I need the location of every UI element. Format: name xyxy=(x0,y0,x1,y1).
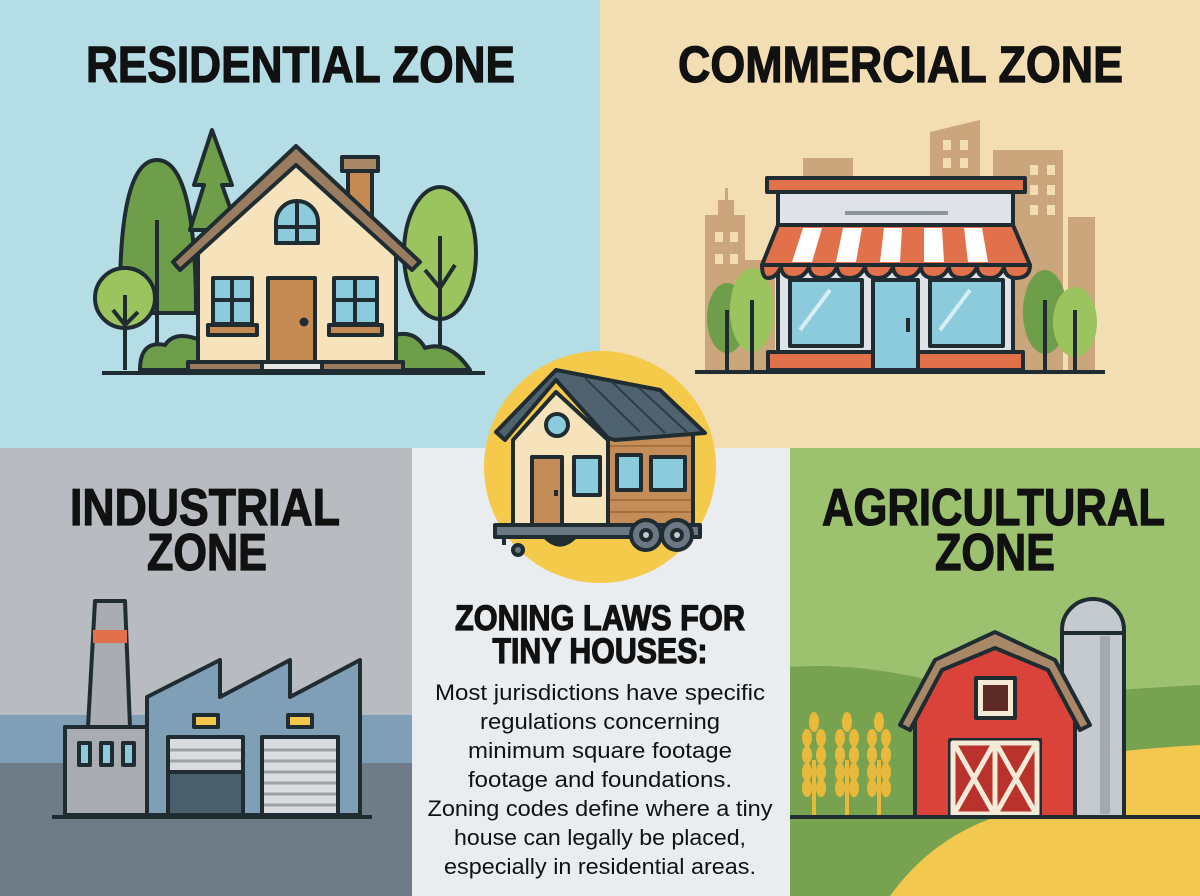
icon: storefront xyxy=(695,178,1105,372)
heading: agricultural zone xyxy=(822,479,1165,582)
heading: industrial zone xyxy=(70,479,340,582)
text block: description: minimum square footage xyxy=(468,738,732,763)
heading: industrial zone: ZONE xyxy=(147,524,267,582)
text block: description: regulations concerning xyxy=(480,709,720,734)
text block: description: especially in residential areas. xyxy=(444,854,756,879)
text block: description xyxy=(428,680,772,879)
text block: description: footage and foundations. xyxy=(468,767,732,792)
icon: factory xyxy=(52,601,372,817)
heading: commercial zone: COMMERCIAL ZONE xyxy=(678,36,1123,93)
panel: residential xyxy=(0,0,600,448)
icon: house with trees xyxy=(95,130,485,373)
heading: zoning laws for tiny houses: ZONING LAWS FOR xyxy=(455,599,745,638)
panel: agricultural xyxy=(790,448,1200,896)
text block: description: house can legally be placed, xyxy=(454,825,746,850)
panel: center text xyxy=(412,448,790,896)
text block: description: Zoning codes define where a tiny xyxy=(428,796,772,821)
icon: city skyline xyxy=(705,120,1095,370)
heading: zoning laws for tiny houses xyxy=(455,599,745,671)
heading: zoning laws for tiny houses: TINY HOUSES: xyxy=(492,632,708,671)
heading: residential zone: RESIDENTIAL ZONE xyxy=(86,36,515,93)
icon: tiny house on trailer xyxy=(484,351,716,583)
text block: description: Most jurisdictions have specific xyxy=(435,680,765,705)
panel: industrial xyxy=(0,448,412,896)
panel: commercial xyxy=(600,0,1200,448)
heading: agricultural zone: ZONE xyxy=(935,524,1055,582)
icon: barn and silo xyxy=(790,599,1200,817)
icon: wheat xyxy=(802,712,891,817)
heading: industrial zone: INDUSTRIAL xyxy=(70,479,340,537)
